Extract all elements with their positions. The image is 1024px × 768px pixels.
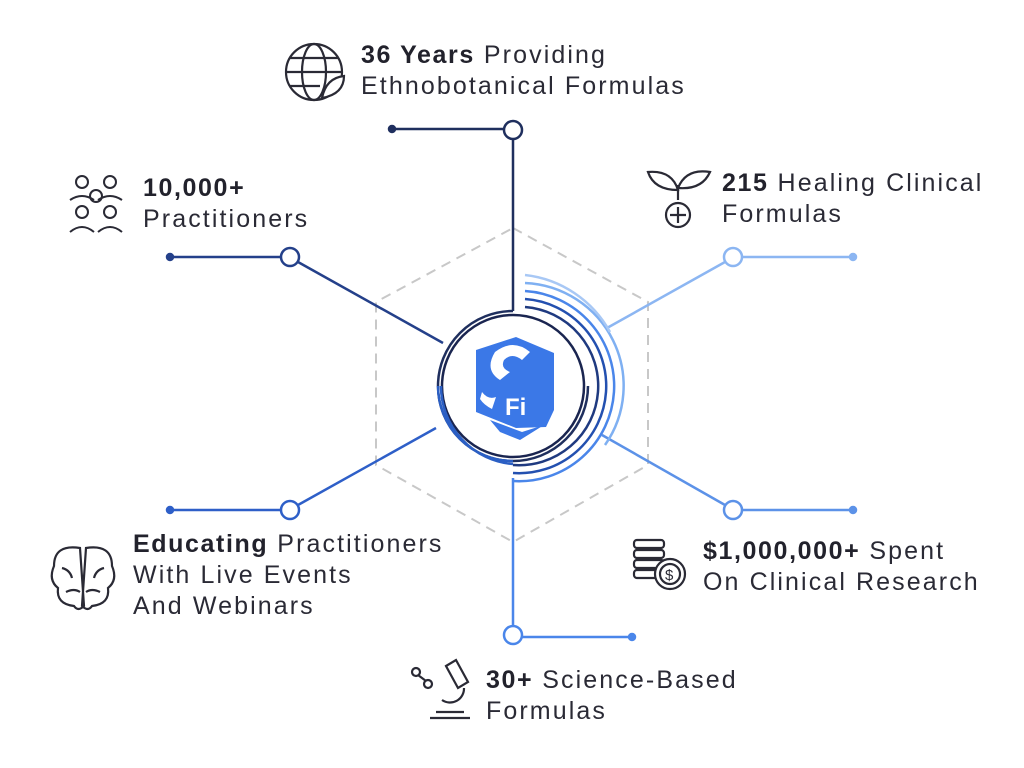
text: clinical formulas: Formulas	[722, 200, 843, 228]
text: educating: Educating Practitioners	[133, 530, 444, 558]
text: educating: And Webinars	[133, 592, 315, 620]
text: educating: With Live Events	[133, 561, 353, 589]
hexagon dashed	[376, 228, 648, 542]
icon: microscope	[412, 660, 470, 718]
text: years	[361, 41, 686, 100]
text: clinical formulas	[722, 169, 983, 228]
connector: top-right	[607, 248, 856, 328]
center rings	[438, 275, 624, 481]
connector: bottom	[504, 478, 635, 644]
text: practitioners: 10,000+	[143, 174, 245, 202]
icon: brain	[52, 547, 114, 609]
icon: sprout	[648, 171, 710, 227]
logo: Fi	[505, 394, 526, 421]
connector: top-left	[167, 248, 443, 343]
connector: top	[389, 121, 522, 311]
text: science	[486, 666, 738, 725]
icon: people	[70, 176, 122, 232]
connector: bottom-left	[167, 428, 436, 519]
connector: bottom-right	[602, 435, 856, 519]
text: research: On Clinical Research	[703, 568, 980, 596]
logo	[476, 337, 554, 440]
text: educating	[133, 530, 444, 620]
icon: globe	[286, 44, 344, 100]
text: science: 30+ Science-Based	[486, 666, 738, 694]
text: science: Formulas	[486, 697, 607, 725]
text: practitioners	[143, 174, 309, 233]
text: research: $1,000,000+ Spent	[703, 537, 945, 565]
text: clinical formulas: 215 Healing Clinical	[722, 169, 983, 197]
icon: coins: $	[665, 567, 674, 584]
text: practitioners: Practitioners	[143, 205, 309, 233]
text: research	[703, 537, 980, 596]
text: years: Ethnobotanical Formulas	[361, 72, 686, 100]
text: years: 36 Years Providing	[361, 41, 607, 69]
icon: coins	[634, 540, 685, 589]
